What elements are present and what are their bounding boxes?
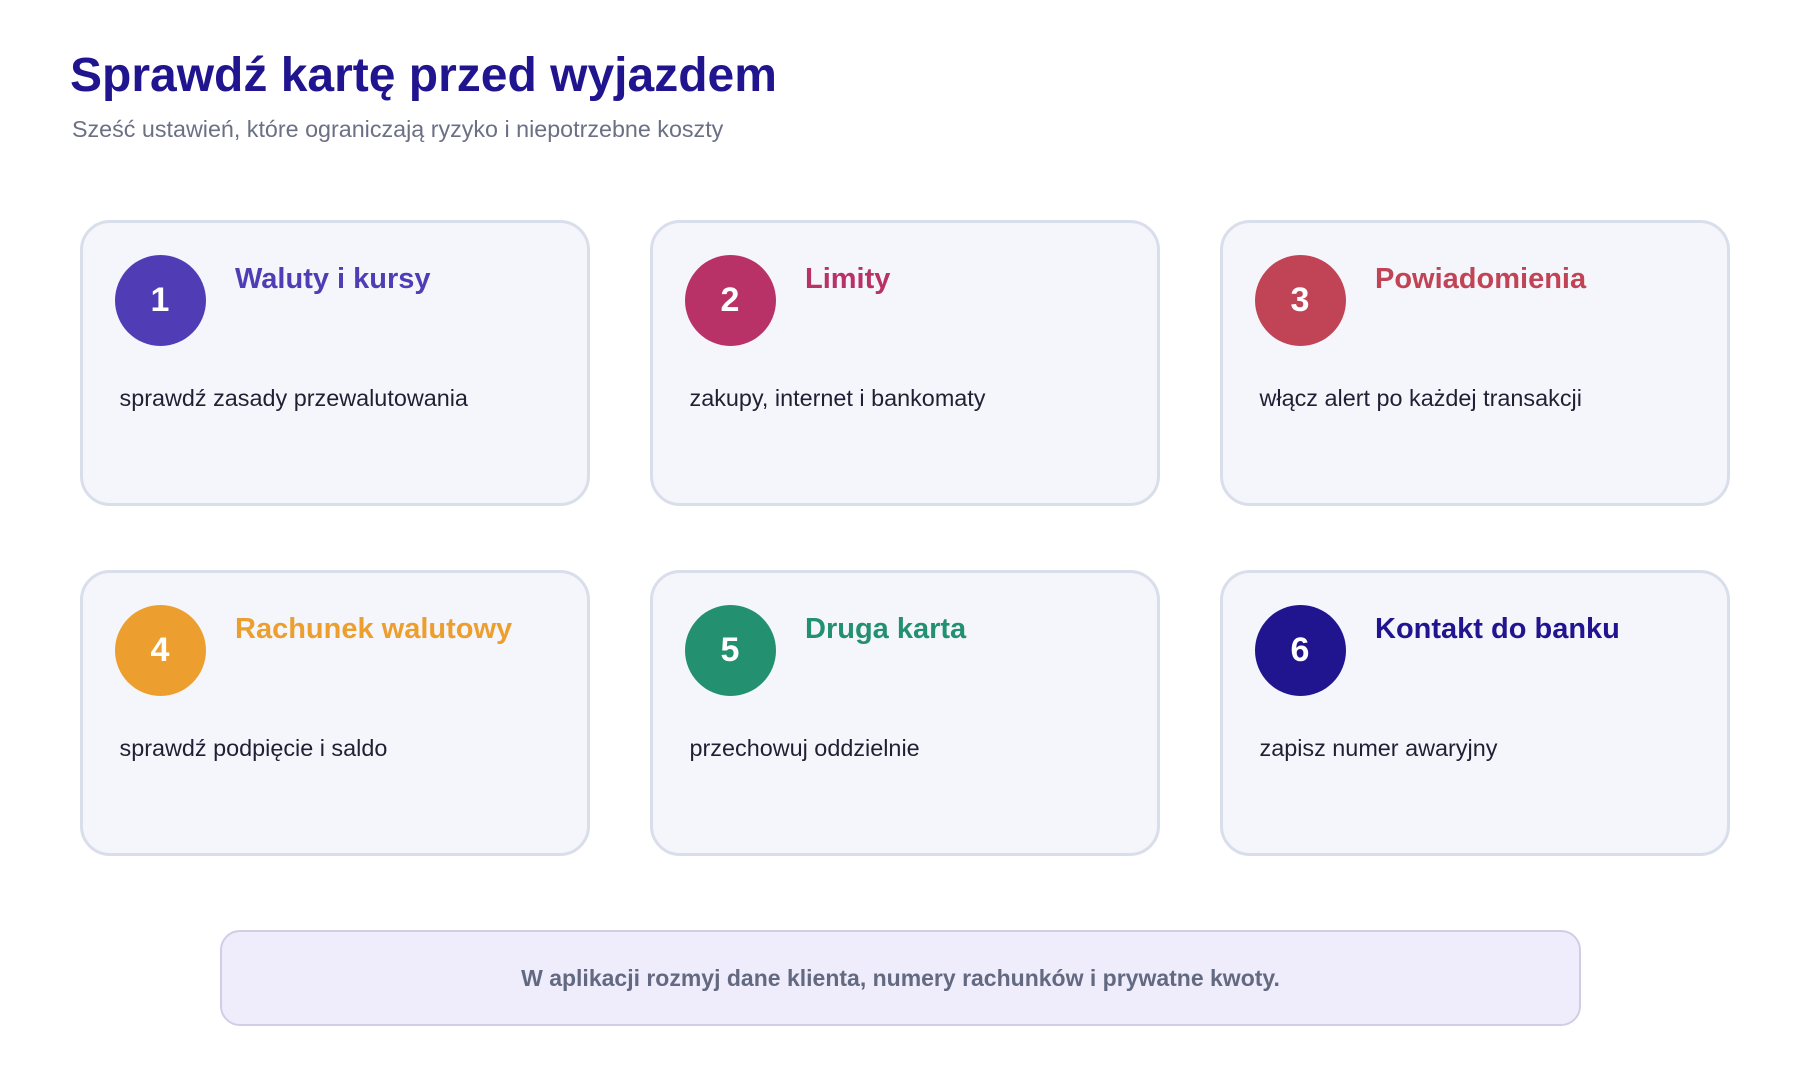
text: card 2 body: zakupy, internet i bankomaty xyxy=(690,384,986,410)
icon: number 5 xyxy=(685,605,776,696)
panel: card 3 Powiadomienia xyxy=(1220,220,1730,506)
icon: number 2: 2 xyxy=(721,281,739,319)
icon: number 1 xyxy=(115,255,206,346)
panel: card 2 Limity xyxy=(650,220,1160,506)
heading: Rachunek walutowy: Rachunek walutowy xyxy=(235,613,512,645)
heading: Limity: Limity xyxy=(805,263,890,295)
icon: number 6 xyxy=(1255,605,1346,696)
icon: number 4 xyxy=(115,605,206,696)
icon: number 5: 5 xyxy=(721,631,739,669)
heading: Kontakt do banku: Kontakt do banku xyxy=(1375,613,1620,645)
text: card 4 body: sprawdź podpięcie i saldo xyxy=(120,734,387,760)
title: Sprawdź kartę przed wyjazdem xyxy=(70,49,777,102)
panel: card 4 Rachunek walutowy xyxy=(80,570,590,856)
icon: number 6: 6 xyxy=(1291,631,1309,669)
panel: card 6 Kontakt do banku xyxy=(1220,570,1730,856)
icon: number 4: 4 xyxy=(151,631,169,669)
text: card 3 body: włącz alert po każdej transakcji xyxy=(1260,384,1582,410)
icon: number 3 xyxy=(1255,255,1346,346)
heading: Druga karta: Druga karta xyxy=(805,613,966,645)
icon: number 1: 1 xyxy=(151,281,169,319)
heading: Waluty i kursy: Waluty i kursy xyxy=(235,263,431,295)
callout: privacy note xyxy=(220,930,1581,1026)
text: card 5 body: przechowuj oddzielnie xyxy=(690,734,920,760)
panel: card 1 Waluty i kursy xyxy=(80,220,590,506)
icon: number 3: 3 xyxy=(1291,281,1309,319)
panel: card 5 Druga karta xyxy=(650,570,1160,856)
text: card 6 body: zapisz numer awaryjny xyxy=(1260,734,1497,760)
callout: privacy note: W aplikacji rozmyj dane klienta, numery rachunków i prywatne kwoty. xyxy=(521,965,1280,991)
text: card 1 body: sprawdź zasady przewalutowania xyxy=(120,384,468,410)
heading: Powiadomienia: Powiadomienia xyxy=(1375,263,1586,295)
icon: number 2 xyxy=(685,255,776,346)
subtitle: Sześć ustawień, które ograniczają ryzyko i niepotrzebne koszty xyxy=(72,116,723,142)
